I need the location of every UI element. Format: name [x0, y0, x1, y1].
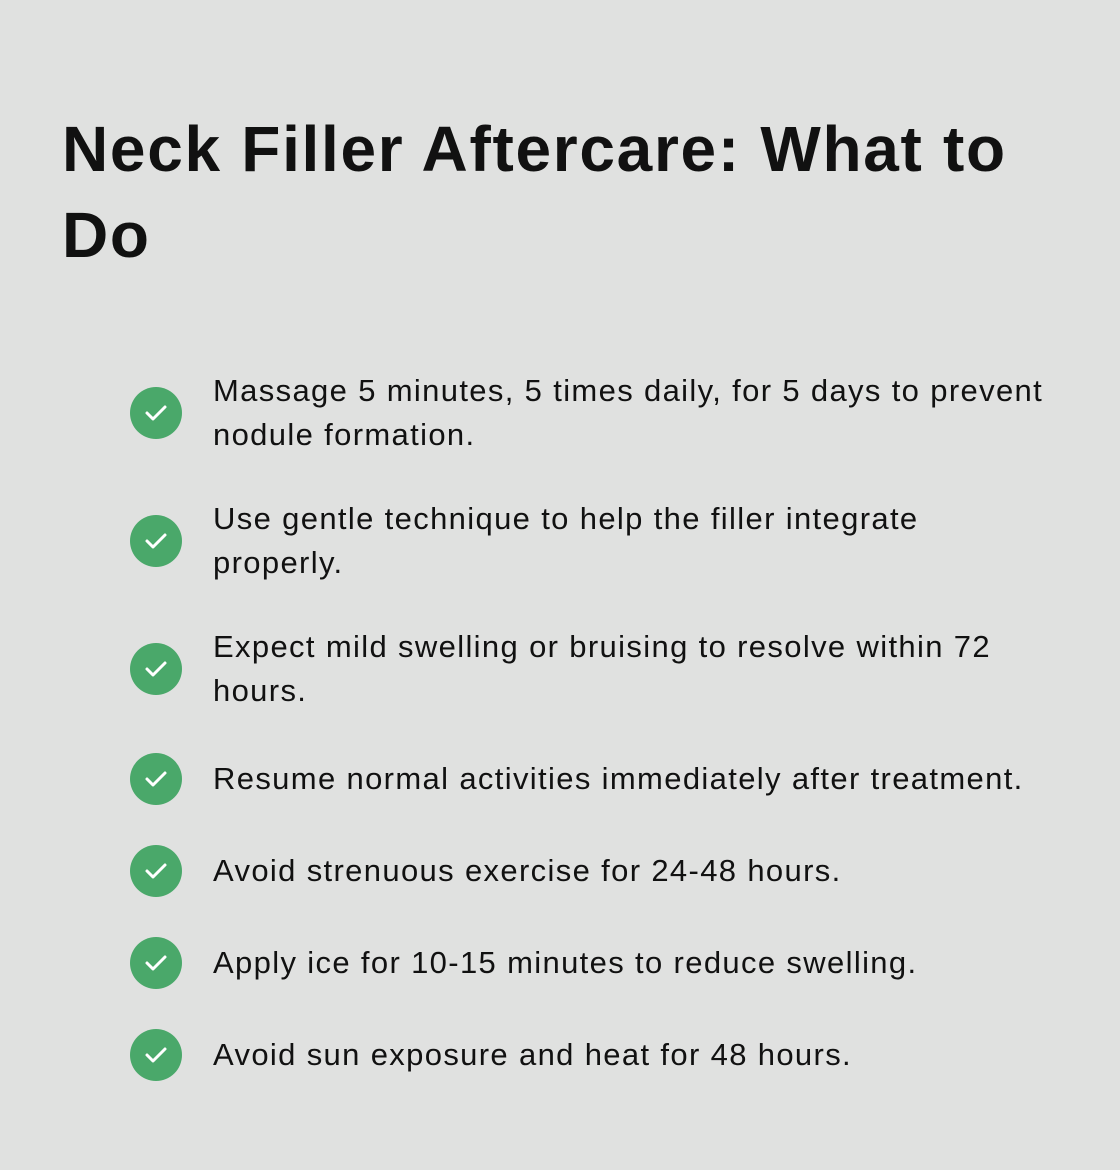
text [213, 629, 991, 708]
icon: check [130, 753, 182, 805]
item: exercise [130, 845, 842, 897]
text: Avoid strenuous exercise for 24-48 hours. [213, 853, 842, 888]
text: Expect mild swelling or bruising to resolve within 72 [213, 629, 991, 664]
text [213, 373, 1043, 452]
item: swelling [130, 629, 991, 708]
text: Massage 5 minutes, 5 times daily, for 5 days to prevent [213, 373, 1043, 408]
text: Avoid sun exposure and heat for 48 hours. [213, 1037, 852, 1072]
item: massage [130, 373, 1043, 452]
item: sun [130, 1029, 852, 1081]
item: gentle technique [130, 501, 919, 580]
text: Resume normal activities immediately after treatment. [213, 761, 1024, 796]
text: Apply ice for 10-15 minutes to reduce swelling. [213, 945, 917, 980]
item: resume [130, 753, 1024, 805]
text: Use gentle technique to help the filler integrate [213, 501, 919, 536]
text: properly. [213, 545, 343, 580]
text: hours. [213, 673, 307, 708]
icon: check [130, 845, 182, 897]
text: nodule formation. [213, 417, 476, 452]
icon: check [130, 1029, 182, 1081]
icon: check [130, 937, 182, 989]
icon: check [130, 387, 182, 439]
icon: check [130, 515, 182, 567]
text [213, 501, 919, 580]
icon: check [130, 643, 182, 695]
title: Neck Filler Aftercare: What to Do [62, 113, 1007, 271]
item: ice [130, 937, 917, 989]
